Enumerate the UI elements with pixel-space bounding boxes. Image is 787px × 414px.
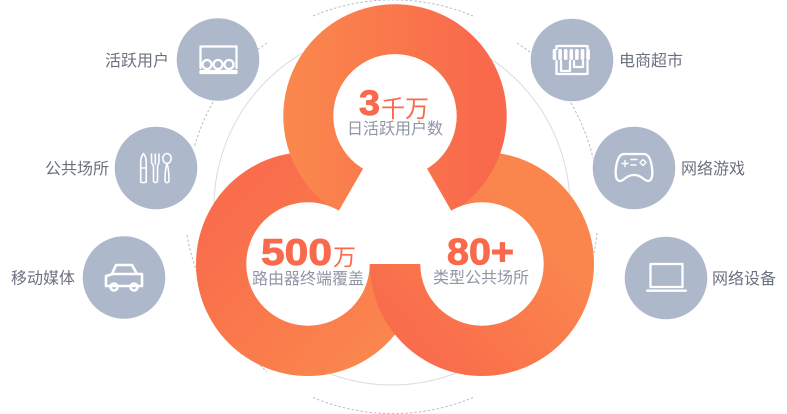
stat: routers covered: 500: [261, 232, 332, 273]
stat: daily active users: 3: [359, 84, 380, 123]
icon: cinema seats: [200, 46, 236, 73]
dashed outer orbit arcs: [187, 0, 597, 414]
ring: bottom left: [196, 152, 420, 376]
label: 电商超市: [619, 52, 683, 70]
icon: knife fork spoon: [141, 154, 171, 183]
icon: game controller: [616, 154, 652, 181]
node: online games: [593, 127, 745, 209]
icon: car: [106, 265, 142, 290]
stat: daily active users: 千万: [381, 96, 429, 123]
stat: daily active users: [347, 84, 443, 138]
stat: venue types: 80+: [447, 232, 514, 272]
node: online shopping: [531, 19, 683, 101]
stat: venue types: [433, 232, 529, 287]
node: mobile media: [11, 236, 165, 319]
stat: routers covered: 万: [333, 244, 356, 270]
node: public venues: [45, 127, 197, 209]
icon: storefront: [553, 46, 590, 74]
label: 活跃用户: [105, 52, 169, 70]
label: 移动媒体: [11, 270, 75, 288]
stat: daily active users: 日活跃用户数: [347, 120, 443, 138]
ring: top: [283, 4, 507, 212]
label: 网络设备: [712, 269, 776, 288]
icon: laptop: [646, 264, 687, 292]
node: active users: [105, 18, 259, 101]
thin inner orbit circle: [214, 29, 570, 385]
label: 公共场所: [45, 160, 109, 178]
stat: routers covered: [252, 232, 364, 288]
node: network devices: [625, 237, 776, 319]
ring: bottom right: [370, 152, 594, 376]
stat: routers covered: 路由器终端覆盖: [252, 270, 364, 288]
stat: venue types: 类型公共场所: [433, 269, 529, 287]
ring holes: [246, 54, 544, 326]
label: 网络游戏: [681, 159, 745, 178]
